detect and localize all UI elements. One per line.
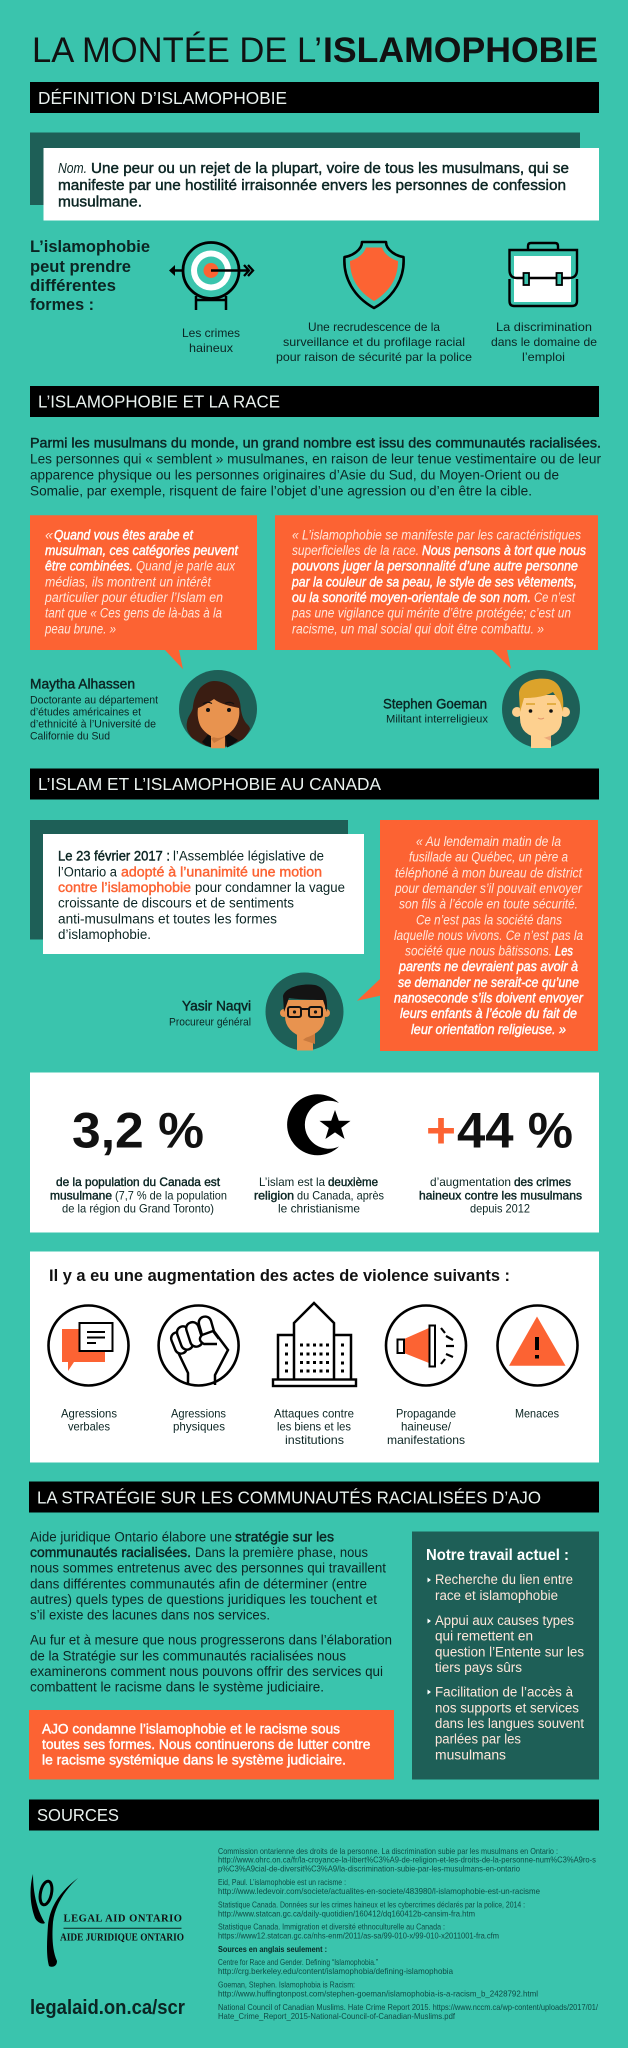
callout: quote Maytha: Quand je parle aux: [136, 559, 236, 574]
icon: portrait Yasir: [266, 972, 344, 1050]
text: forms intro: L’islamophobie: [30, 237, 150, 256]
stat: 3,2 %: (7,7 % de la population: [115, 1188, 227, 1202]
callout: quote Maytha: musulman, ces catégories peuvent: [45, 543, 239, 558]
caption: surveillance: Une recrudescence de la: [308, 320, 440, 334]
icon: portrait Maytha: [179, 670, 257, 748]
section heading: race: [30, 386, 599, 417]
caption: verbal: Agressions: [61, 1406, 117, 1420]
text: Stephen Goeman: Stephen Goeman: [383, 695, 487, 711]
callout: quote Yasir: Ce n’est pas la société dans: [416, 912, 562, 927]
stat: +44 %: des crimes: [514, 1175, 571, 1189]
stat: second religion: deuxième: [328, 1175, 378, 1189]
stat: 3,2 %: musulmane: [50, 1188, 112, 1202]
stat: +44 %: 44 %: [457, 1102, 573, 1158]
text: source list: Statistique Canada. Données sur les crimes haineux et les cybercrimes déclarés par la police, 2014 :: [218, 1899, 525, 1909]
text: race intro: Somalie, par exemple, risquent de faire l’objet d’une agression ou d’en être la cible.: [30, 482, 532, 498]
text: forms intro: formes :: [30, 295, 94, 314]
callout: quote Stephen: Nous pensons à tort que nous: [422, 543, 586, 558]
callout: quote Yasir: Les: [555, 944, 573, 959]
panel: current work: musulmans: [435, 1747, 506, 1762]
title: [32, 31, 598, 70]
panel: Ontario motion: Le 23 février 2017 :: [58, 849, 170, 864]
panel: Ontario motion: contre l’islamophobie: [58, 880, 191, 895]
callout: quote Stephen: racisme, un mal social qui doit être combattu. »: [292, 621, 544, 636]
panel: current work: Facilitation de l’accès à: [435, 1685, 573, 1700]
stat: second religion: L’islam est la: [259, 1175, 325, 1189]
text: forms intro: différentes: [30, 276, 116, 295]
panel: Ontario motion: adopté à l’unanimité une motion: [121, 864, 322, 879]
text: strategy paragraph 1: [30, 1529, 386, 1623]
caption: propaganda: Propagande: [396, 1406, 456, 1420]
text: Yasir Naqvi: Yasir Naqvi: [182, 998, 251, 1014]
caption: physical: physiques: [173, 1420, 225, 1434]
callout: AJO statement: toutes ses formes. Nous continuerons de lutter contre: [42, 1737, 370, 1752]
heading: violence: Il y a eu une augmentation des actes de violence suivants :: [49, 1266, 510, 1285]
section heading: race: L’ISLAMOPHOBIE ET LA RACE: [38, 391, 280, 411]
stat: second religion: [254, 1175, 384, 1216]
icon: megaphone: [386, 1306, 466, 1386]
panel: current work: race et islamophobie: [435, 1588, 558, 1603]
section heading: sources: [29, 1800, 599, 1830]
callout: quote Maytha: [30, 515, 257, 669]
text: Maytha Alhassen: Maytha Alhassen: [30, 675, 135, 691]
panel: Ontario motion: [30, 820, 364, 954]
text: race intro: Parmi les musulmans du monde, un grand nombre est issu des communautés racialisées.: [30, 434, 601, 450]
caption: employment: dans le domaine de: [491, 335, 597, 349]
callout: quote Yasir: laquelle nous vivons. Ce n’est pas la: [394, 928, 583, 943]
caption: surveillance: pour raison de sécurité par la police: [276, 350, 472, 364]
caption: hate crimes: [182, 326, 240, 355]
text: strategy paragraph 1: s’il existe des lacunes dans nos services.: [30, 1608, 270, 1623]
text: forms intro: [30, 237, 150, 314]
callout: quote Maytha: être combinées.: [45, 559, 133, 574]
callout: quote Yasir: leurs enfants à l’école du fait de: [400, 1006, 577, 1021]
stat: +44 %: haineux contre les musulmans: [419, 1188, 582, 1202]
section heading: Canada: L’ISLAM ET L’ISLAMOPHOBIE AU CANADA: [38, 774, 381, 794]
callout: quote Yasir: son fils à l’école en toute sécurité.: [399, 897, 578, 912]
callout: quote Yasir: [357, 820, 598, 1051]
callout: quote Yasir: société que nous bâtissons.: [405, 944, 552, 959]
text: strategy paragraph 2: combattent le racisme dans le système judiciaire.: [30, 1680, 324, 1695]
caption: property: les biens et les: [277, 1420, 351, 1434]
text: Yasir Naqvi: Procureur général: [169, 1017, 251, 1029]
text: source list: http://www.huffingtonpost.com/stephen-goeman/islamophobia-is-a-racism_b_2428792.html: [218, 1989, 538, 1999]
callout: quote Maytha: particulier pour étudier l’Islam en: [44, 590, 223, 605]
text: source list: Eid, Paul. L’islamophobie est un racisme :: [218, 1877, 346, 1887]
callout: quote Yasir: fusillade au Québec, un père a: [409, 850, 568, 865]
panel: Ontario motion: l’Assemblée législative de: [173, 849, 324, 864]
text: Yasir Naqvi: [169, 998, 251, 1029]
panel: Ontario motion: pour condamner la vague: [195, 880, 345, 895]
icon: warning triangle: [498, 1306, 578, 1386]
panel: current work: [412, 1532, 599, 1780]
panel: current work: nos supports et services: [435, 1700, 579, 1715]
text: source list: Statistique Canada. Immigration et diversité ethnoculturelle au Canada :: [218, 1922, 445, 1932]
text: Maytha Alhassen: d’ethnicité à l’Université de: [30, 718, 156, 730]
icon: crescent and star: [287, 1094, 350, 1155]
stat: +44 %: depuis 2012: [470, 1202, 530, 1216]
stat: 3,2 %: de la population du Canada est: [56, 1175, 221, 1189]
panel: current work: qui remettent en: [435, 1629, 533, 1644]
panel: current work: Recherche du lien entre: [435, 1572, 573, 1587]
text: strategy paragraph 2: [30, 1633, 392, 1695]
panel: Ontario motion: croissante de discours et de sentiments: [58, 896, 294, 911]
caption: property: [274, 1406, 354, 1447]
caption: propaganda: haineuse/: [401, 1420, 452, 1434]
caption: surveillance: [276, 320, 472, 364]
caption: verbal: verbales: [68, 1420, 110, 1434]
stat: second religion: du Canada, après: [297, 1188, 384, 1202]
text: website: legalaid.on.ca/scr: [30, 1997, 185, 2019]
callout: quote Maytha: médias, ils montrent un intérêt: [45, 574, 212, 589]
text: strategy paragraph 1: communautés racialisées.: [30, 1545, 191, 1560]
text: strategy paragraph 2: de la Stratégie sur les communautés racialisées nous: [30, 1648, 346, 1663]
text: Maytha Alhassen: Californie du Sud: [30, 730, 110, 742]
section heading: définition: [30, 82, 599, 113]
callout: quote Maytha: tant que « Ces gens de là-bas à la: [45, 606, 222, 621]
panel: definition: Une peur ou un rejet de la plupart, voire de tous les musulmans, qui se: [91, 161, 569, 177]
callout: quote Stephen: par la couleur de sa peau, le style de ses vêtements,: [291, 574, 577, 589]
panel: definition: [30, 132, 599, 220]
icon: target: [169, 242, 253, 310]
callout: quote Stephen: Ce n’est: [534, 590, 576, 605]
section heading: strategy: [29, 1482, 599, 1512]
panel: statistics: [30, 1072, 599, 1232]
caption: surveillance: surveillance et du profilage racial: [283, 335, 465, 349]
callout: quote Yasir: « Au lendemain matin de la: [416, 834, 561, 849]
callout: AJO statement: [29, 1710, 394, 1780]
section heading: sources: SOURCES: [37, 1805, 119, 1825]
text: strategy paragraph 1: Aide juridique Ontario élabore une: [30, 1529, 232, 1544]
text: source list: http://www.ledevoir.com/societe/actualites-en-societe/483980/l-islamophobie-est-un-racisme: [218, 1886, 540, 1896]
text: Maytha Alhassen: Doctorante au département: [30, 694, 158, 706]
text: Maytha Alhassen: [30, 675, 158, 742]
text: race intro: apparence physique ou les personnes originaires d’Asie du Sud, du Moyen-Orient ou de: [30, 466, 559, 482]
text: forms intro: peut prendre: [30, 257, 131, 276]
caption: property: institutions: [285, 1433, 344, 1447]
logo: Legal Aid Ontario: [31, 1874, 184, 1967]
panel: Ontario motion: l’Ontario a: [58, 864, 117, 879]
caption: propaganda: [387, 1406, 465, 1447]
text: strategy paragraph 2: examinerons comment nous pouvons offrir des services qui: [30, 1664, 383, 1679]
panel: definition: Nom.: [58, 161, 87, 177]
callout: quote Yasir: nanoseconde s’ils doivent envoyer: [394, 990, 583, 1006]
stat: 3,2 %: [50, 1102, 227, 1216]
caption: hate crimes: haineux: [189, 341, 233, 355]
callout: quote Maytha: peau brune. »: [44, 621, 116, 636]
stat: +44 %: [419, 1102, 582, 1216]
stat: second religion: religion: [254, 1188, 294, 1202]
icon: building: [273, 1303, 356, 1386]
callout: AJO statement: le racisme systémique dans le système judiciaire.: [42, 1753, 346, 1768]
text: strategy paragraph 2: Au fur et à mesure que nous progresserons dans l’élaboration: [30, 1633, 392, 1648]
panel: current work: dans les langues souvent: [435, 1716, 584, 1731]
panel: current work: parlées par les: [435, 1732, 521, 1747]
text: source list: Commission ontarienne des droits de la personne. La discrimination subie par les musulmans en Ontario :: [218, 1846, 558, 1856]
caption: hate crimes: Les crimes: [182, 326, 240, 340]
callout: quote Stephen: pouvons juger la personnalité d’une autre personne: [291, 559, 578, 574]
section heading: strategy: LA STRATÉGIE SUR LES COMMUNAUTÉS RACIALISÉES D’AJO: [37, 1487, 541, 1507]
stat: 3,2 %: de la région du Grand Toronto): [62, 1202, 214, 1216]
title: ISLAMOPHOBIE: [323, 31, 598, 70]
caption: threats: Menaces: [515, 1406, 559, 1420]
callout: quote Stephen: [275, 515, 598, 669]
panel: current work: question l’Entente sur les: [435, 1644, 584, 1659]
title: LA MONTÉE DE L’: [32, 31, 322, 70]
panel: current work: Appui aux causes types: [435, 1613, 574, 1628]
panel: acts of violence: [30, 1252, 599, 1462]
callout: quote Stephen: pas une vigilance qui mérite d’être protégée; c’est un: [291, 606, 571, 621]
text: strategy paragraph 1: nous sommes entretenus avec des personnes qui travaillent: [30, 1561, 386, 1576]
text: source list: Goeman, Stephen. Islamophobia is Racism:: [218, 1980, 355, 1990]
stat: second religion: le christianisme: [278, 1202, 360, 1216]
logo: Legal Aid Ontario: AIDE JURIDIQUE ONTARIO: [60, 1933, 184, 1944]
text: Maytha Alhassen: d’études américaines et: [30, 706, 141, 718]
caption: physical: Agressions: [171, 1406, 226, 1420]
text: Stephen Goeman: [383, 695, 489, 725]
panel: definition: musulmane.: [58, 195, 142, 211]
logo: Legal Aid Ontario: LEGAL AID ONTARIO: [64, 1914, 182, 1925]
text: strategy paragraph 1: autres) quels types de questions juridiques les touchent et: [30, 1592, 377, 1607]
text: race intro: [30, 434, 601, 498]
callout: quote Stephen: ou la sonorité moyen-orientale de son nom.: [292, 590, 531, 605]
panel: Ontario motion: anti-musulmans et toutes les formes: [58, 911, 277, 926]
section heading: définition: DÉFINITION D’ISLAMOPHOBIE: [38, 88, 287, 108]
caption: propaganda: manifestations: [387, 1433, 465, 1447]
panel: current work: Notre travail actuel :: [426, 1547, 569, 1564]
panel: definition: manifeste par une hostilité irraisonnée envers les personnes de confession: [58, 178, 566, 194]
text: strategy paragraph 1: Dans la première phase, nous: [195, 1545, 368, 1560]
icon: fist: [159, 1306, 239, 1386]
text: source list: [218, 1846, 599, 2021]
caption: employment: [491, 320, 597, 364]
callout: quote Yasir: leur orientation religieuse. »: [411, 1022, 566, 1037]
caption: property: Attaques contre: [274, 1406, 354, 1420]
text: source list: p%C3%A9cial-de-diversit%C3%A9/la-discrimination-subie-par-les-musulmans-en-ontario: [218, 1864, 520, 1874]
text: source list: Hate_Crime_Report_2015-National-Council-of-Canadian-Muslims.pdf: [218, 2011, 456, 2021]
callout: quote Maytha: Quand vous êtes arabe et: [54, 527, 194, 542]
stat: +44 %: d’augmentation: [430, 1175, 511, 1189]
callout: quote Yasir: parents ne devraient pas avoir à: [398, 959, 578, 974]
icon: briefcase: [510, 243, 577, 306]
text: strategy paragraph 1: dans différentes communautés afin de déterminer (entre: [30, 1576, 367, 1591]
callout: quote Stephen: « L’islamophobie se manifeste par les caractéristiques: [292, 527, 581, 542]
stat: 3,2 %: 3,2 %: [72, 1102, 204, 1158]
callout: quote Yasir: téléphoné à mon bureau de district: [395, 865, 583, 880]
text: race intro: Les personnes qui « semblent » musulmanes, en raison de leur tenue vestimentaire ou de leur: [30, 450, 601, 466]
section heading: Canada: [30, 768, 599, 800]
text: source list: http://crg.berkeley.edu/content/islamophobia/defining-islamophobia: [218, 1966, 453, 1976]
panel: Ontario motion: d’islamophobie.: [58, 927, 151, 942]
caption: employment: l’emploi: [522, 350, 565, 364]
callout: AJO statement: AJO condamne l’islamophobie et le racisme sous: [42, 1721, 340, 1736]
text: source list: Sources en anglais seulement :: [218, 1944, 327, 1954]
caption: physical: [171, 1406, 226, 1434]
text: source list: http://www.ohrc.on.ca/fr/la-croyance-la-libert%C3%A9-de-religion-et-les-droits-de-la-personne-num%C3%A9ro-s: [218, 1855, 596, 1865]
callout: quote Yasir: se demander ne serait-ce qu’une: [398, 975, 579, 990]
caption: verbal: [61, 1406, 117, 1434]
callout: quote Maytha: «: [45, 527, 54, 542]
callout: quote Stephen: superficielles de la race.: [292, 543, 419, 558]
text: strategy paragraph 1: stratégie sur les: [235, 1529, 334, 1544]
caption: employment: La discrimination: [496, 320, 592, 334]
panel: current work: tiers pays sûrs: [435, 1660, 522, 1675]
text: Stephen Goeman: Militant interreligieux: [386, 713, 489, 725]
text: source list: https://www12.statcan.gc.ca/nhs-enm/2011/as-sa/99-010-x/99-010-x2011001-fra.cfm: [218, 1931, 499, 1941]
icon: portrait Stephen: [502, 670, 580, 748]
text: source list: Centre for Race and Gender. Defining “Islamophobia.”: [218, 1957, 378, 1967]
callout: quote Yasir: pour demander s’il pouvait envoyer: [394, 881, 582, 896]
text: source list: http://www.statcan.gc.ca/daily-quotidien/160412/dq160412b-cansim-fra.htm: [218, 1908, 475, 1918]
icon: verbal: [48, 1306, 128, 1386]
stat: +44 %: +: [426, 1102, 456, 1158]
icon: shield: [344, 242, 404, 308]
